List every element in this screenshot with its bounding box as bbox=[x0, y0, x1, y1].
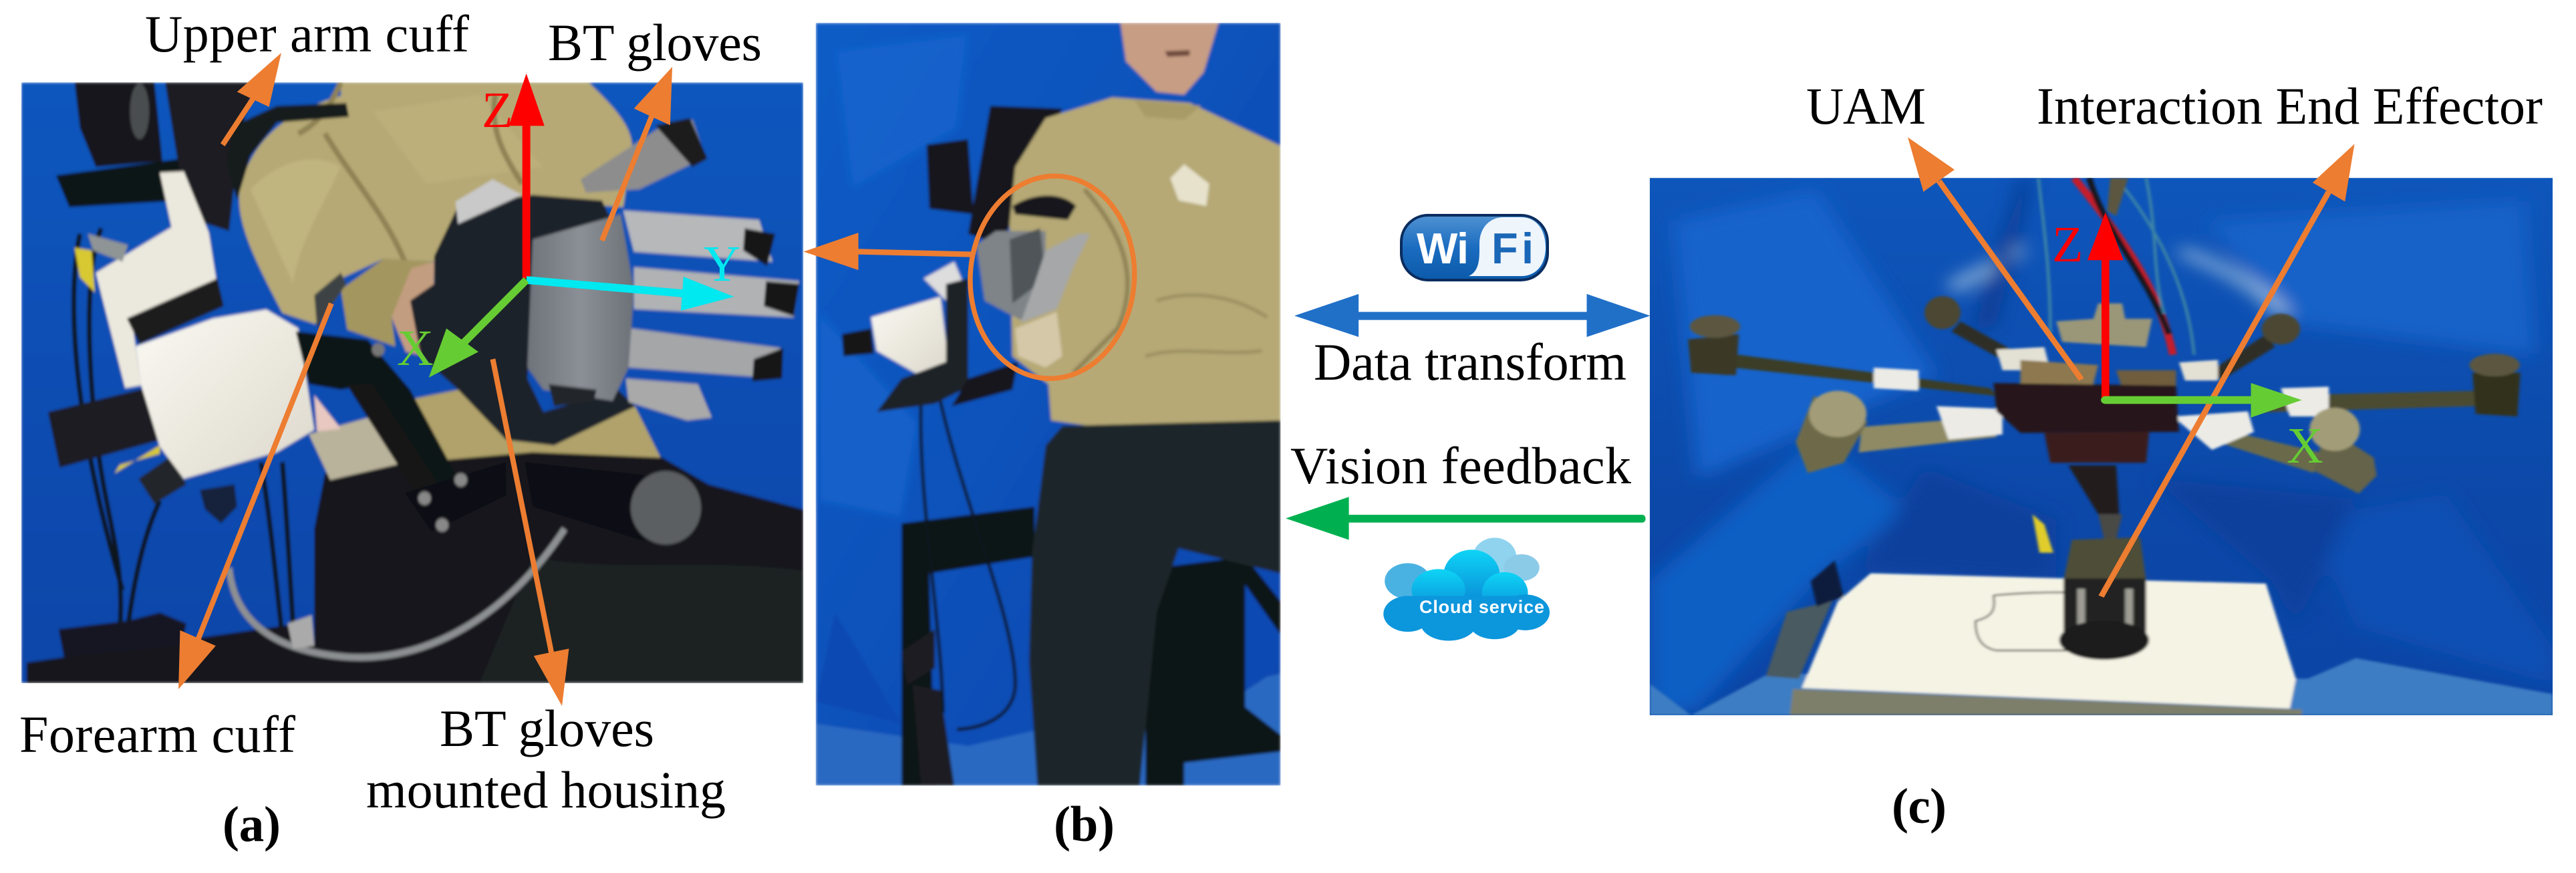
axis label Y on panel (a): Y bbox=[704, 236, 740, 292]
panel (b): operator seated photo bbox=[816, 23, 1280, 785]
axes on panel (a) bbox=[429, 74, 734, 378]
arrow: vision feedback bbox=[1286, 497, 1646, 540]
label: Forearm cuff: Forearm cuff bbox=[19, 705, 295, 763]
arrow: BT gloves mounted housing bbox=[492, 359, 569, 706]
icon: Wi-Fi logo: Fi bbox=[1491, 224, 1534, 273]
axis label X on panel (c): X bbox=[2287, 418, 2323, 474]
caption (a): (a) bbox=[223, 797, 281, 852]
label: Upper arm cuff: Upper arm cuff bbox=[145, 5, 469, 63]
label: BT gloves mounted housing: BT gloves bbox=[440, 699, 654, 757]
icon: Wi-Fi logo: Wi bbox=[1417, 224, 1469, 273]
label: Interaction End Effector: Interaction End Effector bbox=[2037, 77, 2543, 135]
caption (b): (b) bbox=[1054, 797, 1115, 852]
label: UAM: UAM bbox=[1806, 77, 1926, 135]
double arrow: data transform bbox=[1294, 294, 1650, 337]
panel (c): UAM hovering photo bbox=[1650, 178, 2553, 715]
icon: cloud service: Cloud service bbox=[1419, 597, 1544, 617]
icon: Wi-Fi logo bbox=[1401, 215, 1548, 280]
orange highlight ellipse and arrow from panel (b) to panel (a) bbox=[803, 170, 1141, 384]
caption (c): (c) bbox=[1892, 779, 1947, 834]
arrow: forearm cuff bbox=[178, 303, 331, 689]
label: BT gloves mounted housing: mounted housing bbox=[366, 761, 726, 819]
arrow: interaction end effector label bbox=[2101, 144, 2355, 596]
icon: cloud service bbox=[1383, 538, 1550, 641]
axis label X on panel (a): X bbox=[397, 320, 434, 376]
label: Data transform: Data transform bbox=[1314, 333, 1626, 391]
arrow: BT gloves bbox=[602, 67, 672, 241]
label: Vision feedback: Vision feedback bbox=[1290, 436, 1631, 495]
label: BT gloves: BT gloves bbox=[548, 13, 762, 72]
arrow: UAM label bbox=[1908, 137, 2082, 380]
axis label Z on panel (a): Z bbox=[482, 82, 513, 138]
arrow: upper arm cuff bbox=[223, 53, 281, 145]
axis label Z on panel (c): Z bbox=[2052, 217, 2083, 273]
axes on panel (c) bbox=[2088, 213, 2302, 418]
panel (a): arm exoskeleton photo bbox=[21, 82, 803, 683]
